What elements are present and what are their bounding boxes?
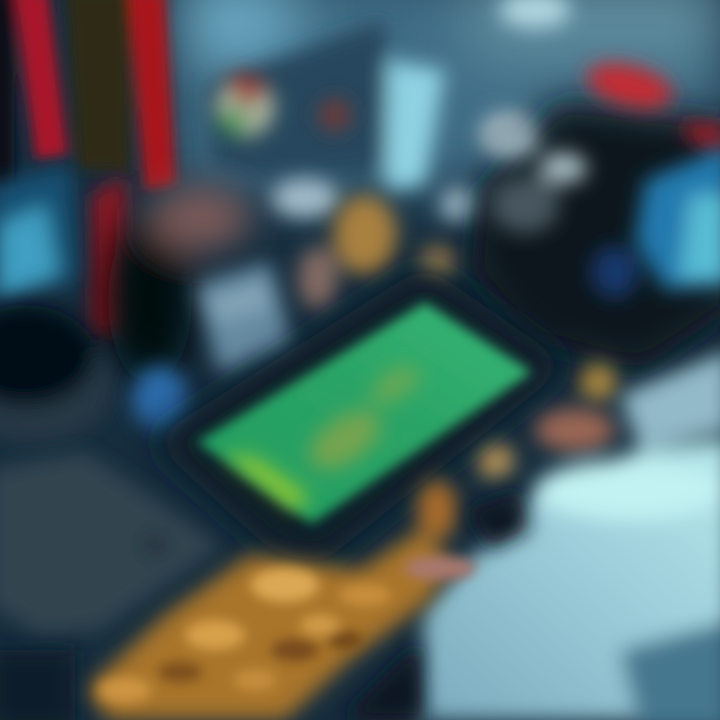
- background highlights: white blocks: [271, 0, 589, 223]
- dark device right: [470, 100, 720, 370]
- device highlights: [482, 122, 587, 233]
- sleeve and hand: [415, 350, 720, 720]
- coin highlights: [99, 556, 476, 703]
- gold coin pile: [85, 480, 457, 720]
- chart panel: back wall: [205, 20, 445, 190]
- smartphone green screen: [197, 302, 532, 524]
- icon: blue round button: [132, 366, 188, 430]
- icon: pie chart: [215, 75, 351, 138]
- dark shadow between coins and sleeve: [0, 490, 530, 720]
- hand: blurred brown and black: [108, 186, 250, 385]
- right screen: [591, 145, 720, 298]
- lower red cable: [92, 175, 130, 335]
- scattered gold coins: [298, 195, 617, 478]
- document card: [195, 262, 292, 375]
- smartphone bezel: [150, 265, 570, 565]
- keyboard: [0, 452, 222, 635]
- background glow: upper wall: [170, 0, 720, 190]
- phone screen details: [222, 357, 426, 510]
- red oval and cable: [582, 55, 720, 158]
- left screen: [0, 165, 78, 305]
- dark round base lower left: [0, 305, 113, 443]
- left red and olive cables: [0, 0, 176, 190]
